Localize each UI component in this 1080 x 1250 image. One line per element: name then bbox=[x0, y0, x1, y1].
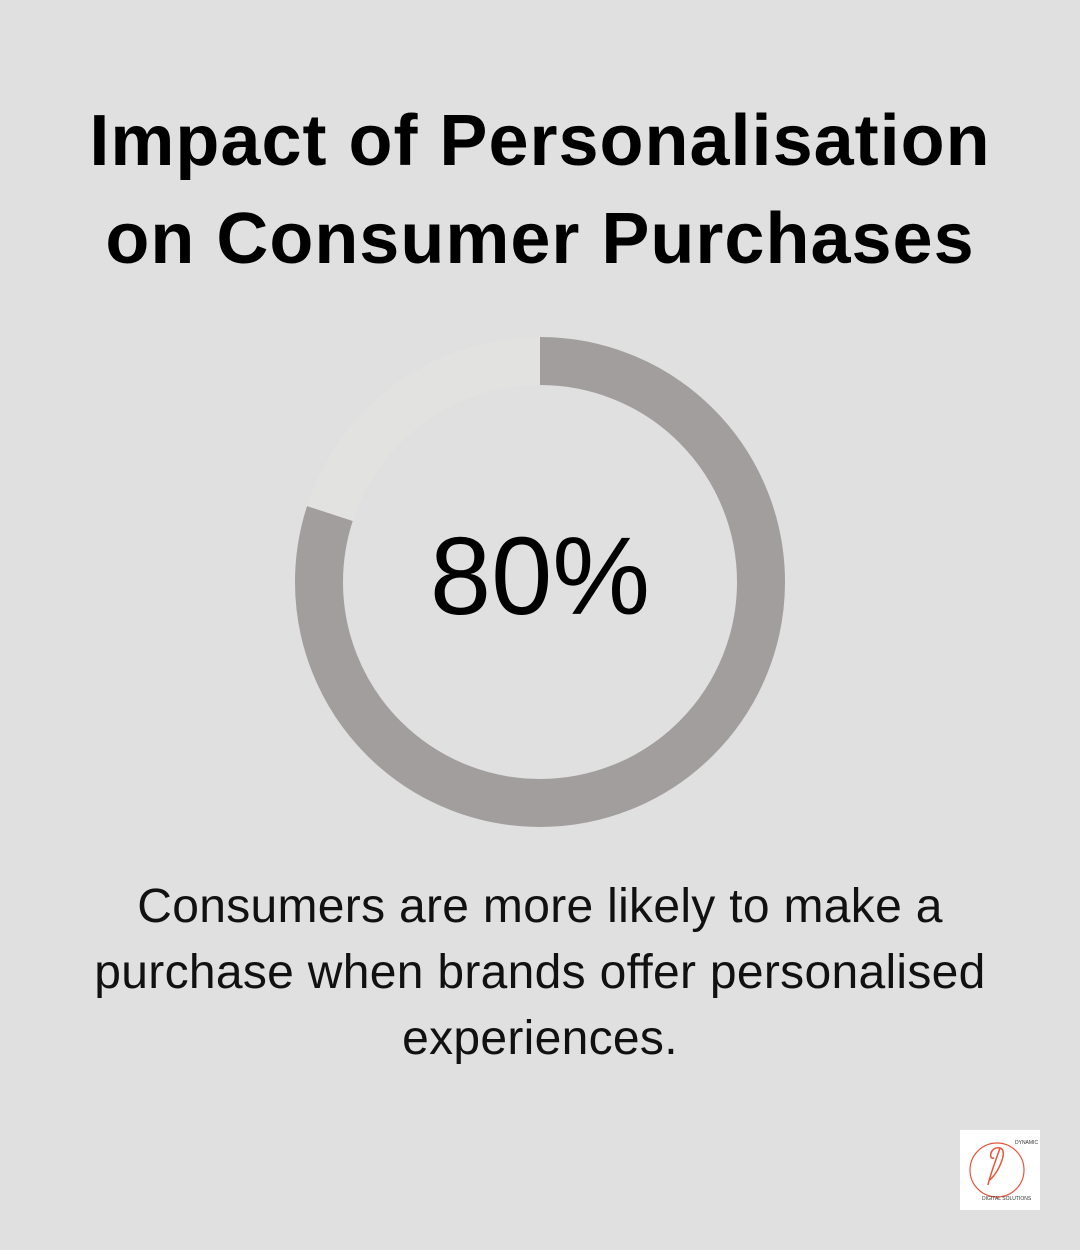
logo: Dynamic Digital Solutions: DYNAMIC bbox=[1015, 1140, 1038, 1146]
donut track remainder bbox=[319, 361, 761, 803]
percentage label: 80% bbox=[430, 515, 650, 638]
description text bbox=[94, 880, 986, 1065]
title: Impact of Personalisation bbox=[89, 101, 991, 181]
description text: Consumers are more likely to make a bbox=[137, 880, 943, 933]
description text: purchase when brands offer personalised bbox=[94, 946, 986, 999]
title bbox=[89, 101, 991, 279]
logo: Dynamic Digital Solutions: DIGITAL SOLUTIONS bbox=[982, 1196, 1032, 1202]
description text: experiences. bbox=[402, 1012, 678, 1065]
donut value arc bbox=[319, 361, 761, 803]
logo: Dynamic Digital Solutions bbox=[960, 1130, 1040, 1210]
title: on Consumer Purchases bbox=[105, 199, 975, 279]
